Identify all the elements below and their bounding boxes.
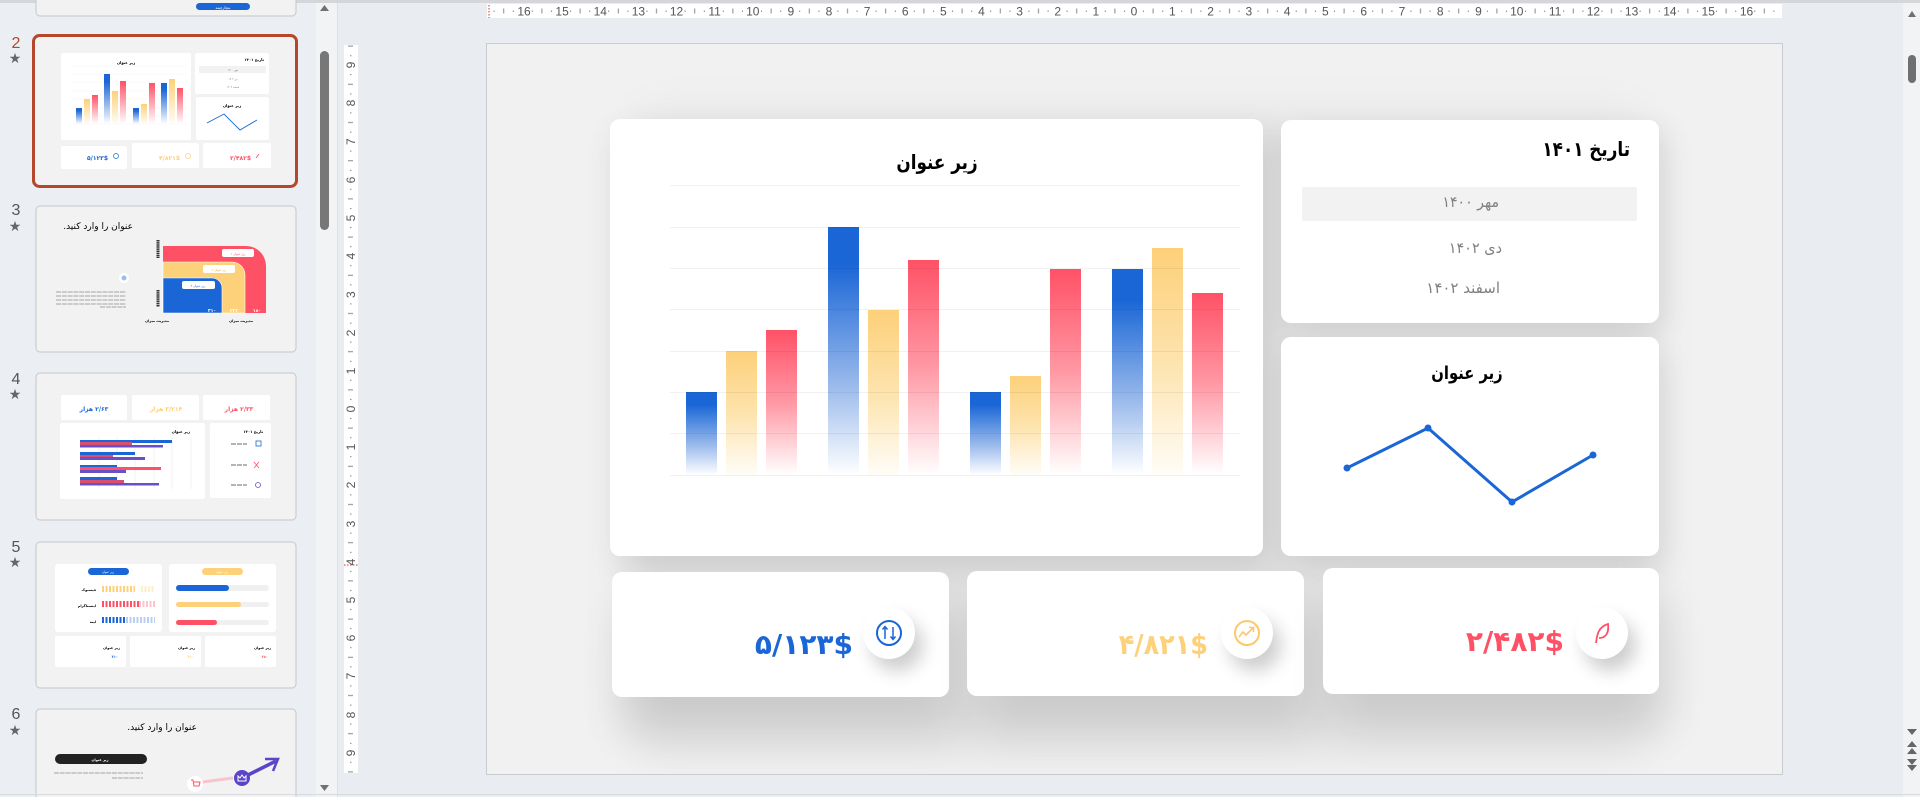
horizontal ruler: 8 bbox=[1437, 4, 1444, 18]
horizontal ruler: 3 bbox=[1245, 4, 1252, 18]
horizontal ruler: 14 bbox=[594, 4, 607, 18]
thumbnail 5: زیر عنوان bbox=[102, 570, 115, 574]
vertical ruler: 8 bbox=[344, 711, 358, 718]
vertical ruler: 7 bbox=[344, 138, 358, 145]
thumbnail 6 (cut off): زیر عنوان bbox=[92, 758, 108, 762]
thumbnail 3: 3 bbox=[12, 202, 21, 219]
vertical ruler: 1 bbox=[344, 367, 358, 374]
vertical ruler: 5 bbox=[344, 214, 358, 221]
vertical ruler: 5 bbox=[344, 596, 358, 603]
horizontal ruler: 6 bbox=[902, 4, 909, 18]
soft shadow backdrop bbox=[625, 115, 1655, 755]
thumbnail 6 (cut off) bbox=[9, 706, 296, 797]
horizontal ruler: 15 bbox=[1702, 4, 1715, 18]
horizontal ruler: 7 bbox=[864, 4, 871, 18]
thumbnail 4: تاریخ ۱۴۰۱ bbox=[243, 429, 264, 434]
thumbnail 2 selected: اسفند ۱۴۰۲ bbox=[227, 86, 239, 89]
stat value yellow: ۴/۸۲۱$ bbox=[1119, 628, 1208, 661]
thumbnail 2 selected: ۲/۴۸۲$ bbox=[230, 155, 251, 162]
thumbnail 4: 4 bbox=[12, 371, 21, 388]
thumbnail 2 selected: زیر عنوان bbox=[117, 60, 135, 65]
horizontal ruler: 13 bbox=[1625, 4, 1639, 18]
vertical ruler: 4 bbox=[344, 558, 358, 565]
vertical ruler: 6 bbox=[344, 176, 358, 183]
thumbnail 2 selected: تاریخ ۱۴۰۱ bbox=[244, 57, 265, 62]
panel: date list card bbox=[1281, 120, 1659, 323]
vertical ruler: 2 bbox=[344, 329, 358, 336]
thumbnail 3: زیر عنوان ۳ bbox=[191, 284, 206, 288]
thumbnail 1 (cut off): بنچارچینه bbox=[215, 5, 231, 10]
horizontal ruler: 16 bbox=[517, 4, 531, 18]
horizontal ruler: 2 bbox=[1054, 4, 1061, 18]
thumbnail 5: زیر عنوان bbox=[254, 646, 271, 650]
horizontal ruler: 4 bbox=[1284, 4, 1291, 18]
panel: blue stat card bbox=[612, 572, 949, 697]
thumbnail 5: ۳۱۰ bbox=[112, 655, 118, 659]
thumbnail 3: عنوان را وارد کنید. bbox=[63, 222, 133, 232]
horizontal ruler: 15 bbox=[555, 4, 569, 18]
thumbnail 3: زیر عنوان ۱ bbox=[231, 252, 246, 256]
thumbnail 1 (cut off) bbox=[36, 0, 296, 16]
icon: trend circle bbox=[1221, 607, 1273, 659]
thumbnail 2 selected: مهر ۱۴۰۰ bbox=[228, 69, 239, 72]
vertical ruler: 4 bbox=[344, 252, 358, 259]
panel: right scrollbar bbox=[1907, 11, 1917, 771]
horizontal ruler: 4 bbox=[978, 4, 985, 18]
thumbnail 6 (cut off): 6 bbox=[12, 706, 21, 723]
horizontal ruler bbox=[487, 4, 1782, 18]
thumbnail 2 selected: ★ bbox=[9, 51, 21, 67]
thumbnail 4 bbox=[9, 371, 296, 520]
thumbnail 4: ۳/۲۱۴ هزار bbox=[149, 406, 183, 413]
horizontal ruler: 11 bbox=[1549, 4, 1562, 18]
line chart bbox=[1344, 424, 1596, 506]
vertical ruler: 6 bbox=[344, 634, 358, 641]
thumbnail 5 bbox=[9, 539, 296, 688]
date row 1: مهر ۱۴۰۰ bbox=[1442, 193, 1499, 211]
horizontal ruler: 9 bbox=[788, 4, 795, 18]
vertical ruler: 9 bbox=[344, 749, 358, 756]
vertical ruler: 7 bbox=[344, 672, 358, 679]
thumbnail 2 selected: 2 bbox=[12, 35, 21, 52]
thumbnail 4: ۲/۶۳ هزار bbox=[79, 406, 109, 413]
icon: feather bbox=[1576, 607, 1628, 659]
thumbnail 5: زیر عنوان bbox=[178, 646, 195, 650]
thumbnail 4: ۲/۳۳ هزار bbox=[224, 406, 254, 413]
vertical ruler: 3 bbox=[344, 291, 358, 298]
thumbnail 2 selected: زیر عنوان bbox=[223, 103, 241, 108]
horizontal ruler: 2 bbox=[1207, 4, 1214, 18]
thumbnail 5: لینه bbox=[90, 620, 97, 624]
heading: bar chart title: زیر عنوان bbox=[896, 150, 978, 174]
horizontal ruler: 7 bbox=[1399, 4, 1406, 18]
panel: main slide bbox=[487, 44, 1782, 774]
horizontal ruler: 0 bbox=[1131, 4, 1138, 18]
vertical ruler: 0 bbox=[344, 405, 358, 412]
sidebar scrollbar bbox=[320, 5, 329, 791]
thumbnail 6 (cut off): عنوان را وارد کنید. bbox=[127, 723, 197, 733]
horizontal ruler: 6 bbox=[1360, 4, 1367, 18]
thumbnail 4: ★ bbox=[9, 387, 21, 403]
thumbnail 5: فیسبوک bbox=[82, 588, 97, 592]
horizontal ruler: 14 bbox=[1663, 4, 1677, 18]
thumbnail 2 selected: ۴/۸۲۱$ bbox=[159, 155, 180, 162]
vertical ruler: 2 bbox=[344, 481, 358, 488]
bar chart bbox=[670, 185, 1240, 476]
thumbnail 3: ۱۸۰ bbox=[253, 309, 261, 314]
thumbnail 5: 5 bbox=[12, 539, 21, 556]
horizontal ruler: 5 bbox=[940, 4, 947, 18]
date row 2: دی ۱۴۰۲ bbox=[1449, 239, 1502, 257]
thumbnail 5: اینستاگرام bbox=[78, 603, 96, 608]
date row 3: اسفند ۱۴۰۲ bbox=[1426, 279, 1500, 297]
stat value red: ۲/۴۸۲$ bbox=[1466, 625, 1564, 658]
horizontal ruler: 12 bbox=[1587, 4, 1600, 18]
thumbnail 2 selected: ۵/۱۲۳$ bbox=[87, 155, 108, 162]
thumbnail 3: مدیریت میزان bbox=[145, 319, 169, 323]
window top edge bbox=[0, 0, 1920, 3]
thumbnail 3: ۲۲۶ bbox=[230, 308, 238, 314]
heading: line chart title: زیر عنوان bbox=[1431, 363, 1503, 384]
horizontal ruler: 8 bbox=[826, 4, 833, 18]
vertical ruler: 1 bbox=[344, 443, 358, 450]
horizontal ruler: 13 bbox=[632, 4, 645, 18]
panel: slide thumbnails sidebar bbox=[9, 0, 338, 797]
thumbnail 2 selected: دی ۱۴۰۲ bbox=[228, 78, 238, 81]
icon: arrows up down bbox=[863, 607, 915, 659]
vertical ruler: 8 bbox=[344, 99, 358, 106]
stat value blue: ۵/۱۲۳$ bbox=[755, 628, 853, 661]
horizontal ruler: 1 bbox=[1093, 4, 1100, 18]
thumbnail 6 (cut off): ★ bbox=[9, 723, 21, 739]
panel: yellow stat card bbox=[967, 571, 1304, 696]
horizontal ruler: 12 bbox=[670, 4, 683, 18]
heading: date title: تاریخ ۱۴۰۱ bbox=[1542, 137, 1630, 161]
vertical ruler: 9 bbox=[344, 61, 358, 68]
horizontal ruler: 16 bbox=[1740, 4, 1753, 18]
horizontal ruler: 9 bbox=[1475, 4, 1482, 18]
thumbnail 3: ★ bbox=[9, 219, 21, 235]
thumbnail 5: زیر عنوان bbox=[216, 570, 229, 574]
horizontal ruler: 1 bbox=[1169, 4, 1176, 18]
vertical ruler bbox=[344, 45, 358, 773]
horizontal ruler: 10 bbox=[1510, 4, 1524, 18]
thumbnail 3: مدیریت میزان bbox=[229, 319, 253, 323]
window bottom edge bbox=[0, 794, 1920, 795]
thumbnail 3: ۳۱۰ bbox=[208, 308, 216, 314]
thumbnail 5: ۳۱۰ bbox=[188, 655, 194, 659]
thumbnail 4: زیر عنوان bbox=[172, 429, 190, 434]
thumbnail 5: زیر عنوان bbox=[103, 646, 120, 650]
thumbnail 2 selected bbox=[9, 35, 296, 186]
highlighted row bbox=[1302, 187, 1637, 221]
panel: red stat card bbox=[1323, 568, 1659, 694]
panel: bar chart card bbox=[610, 119, 1263, 556]
thumbnail 3: زیر عنوان ۲ bbox=[212, 268, 227, 272]
horizontal ruler: 11 bbox=[708, 4, 721, 18]
vertical ruler: 3 bbox=[344, 520, 358, 527]
thumbnail 5: ★ bbox=[9, 555, 21, 571]
horizontal ruler: 10 bbox=[746, 4, 760, 18]
thumbnail 5: ۳۸۰ bbox=[262, 655, 268, 659]
thumbnail 3 bbox=[9, 202, 296, 352]
horizontal ruler: 3 bbox=[1016, 4, 1023, 18]
panel: line chart card bbox=[1281, 337, 1659, 556]
horizontal ruler: 5 bbox=[1322, 4, 1329, 18]
